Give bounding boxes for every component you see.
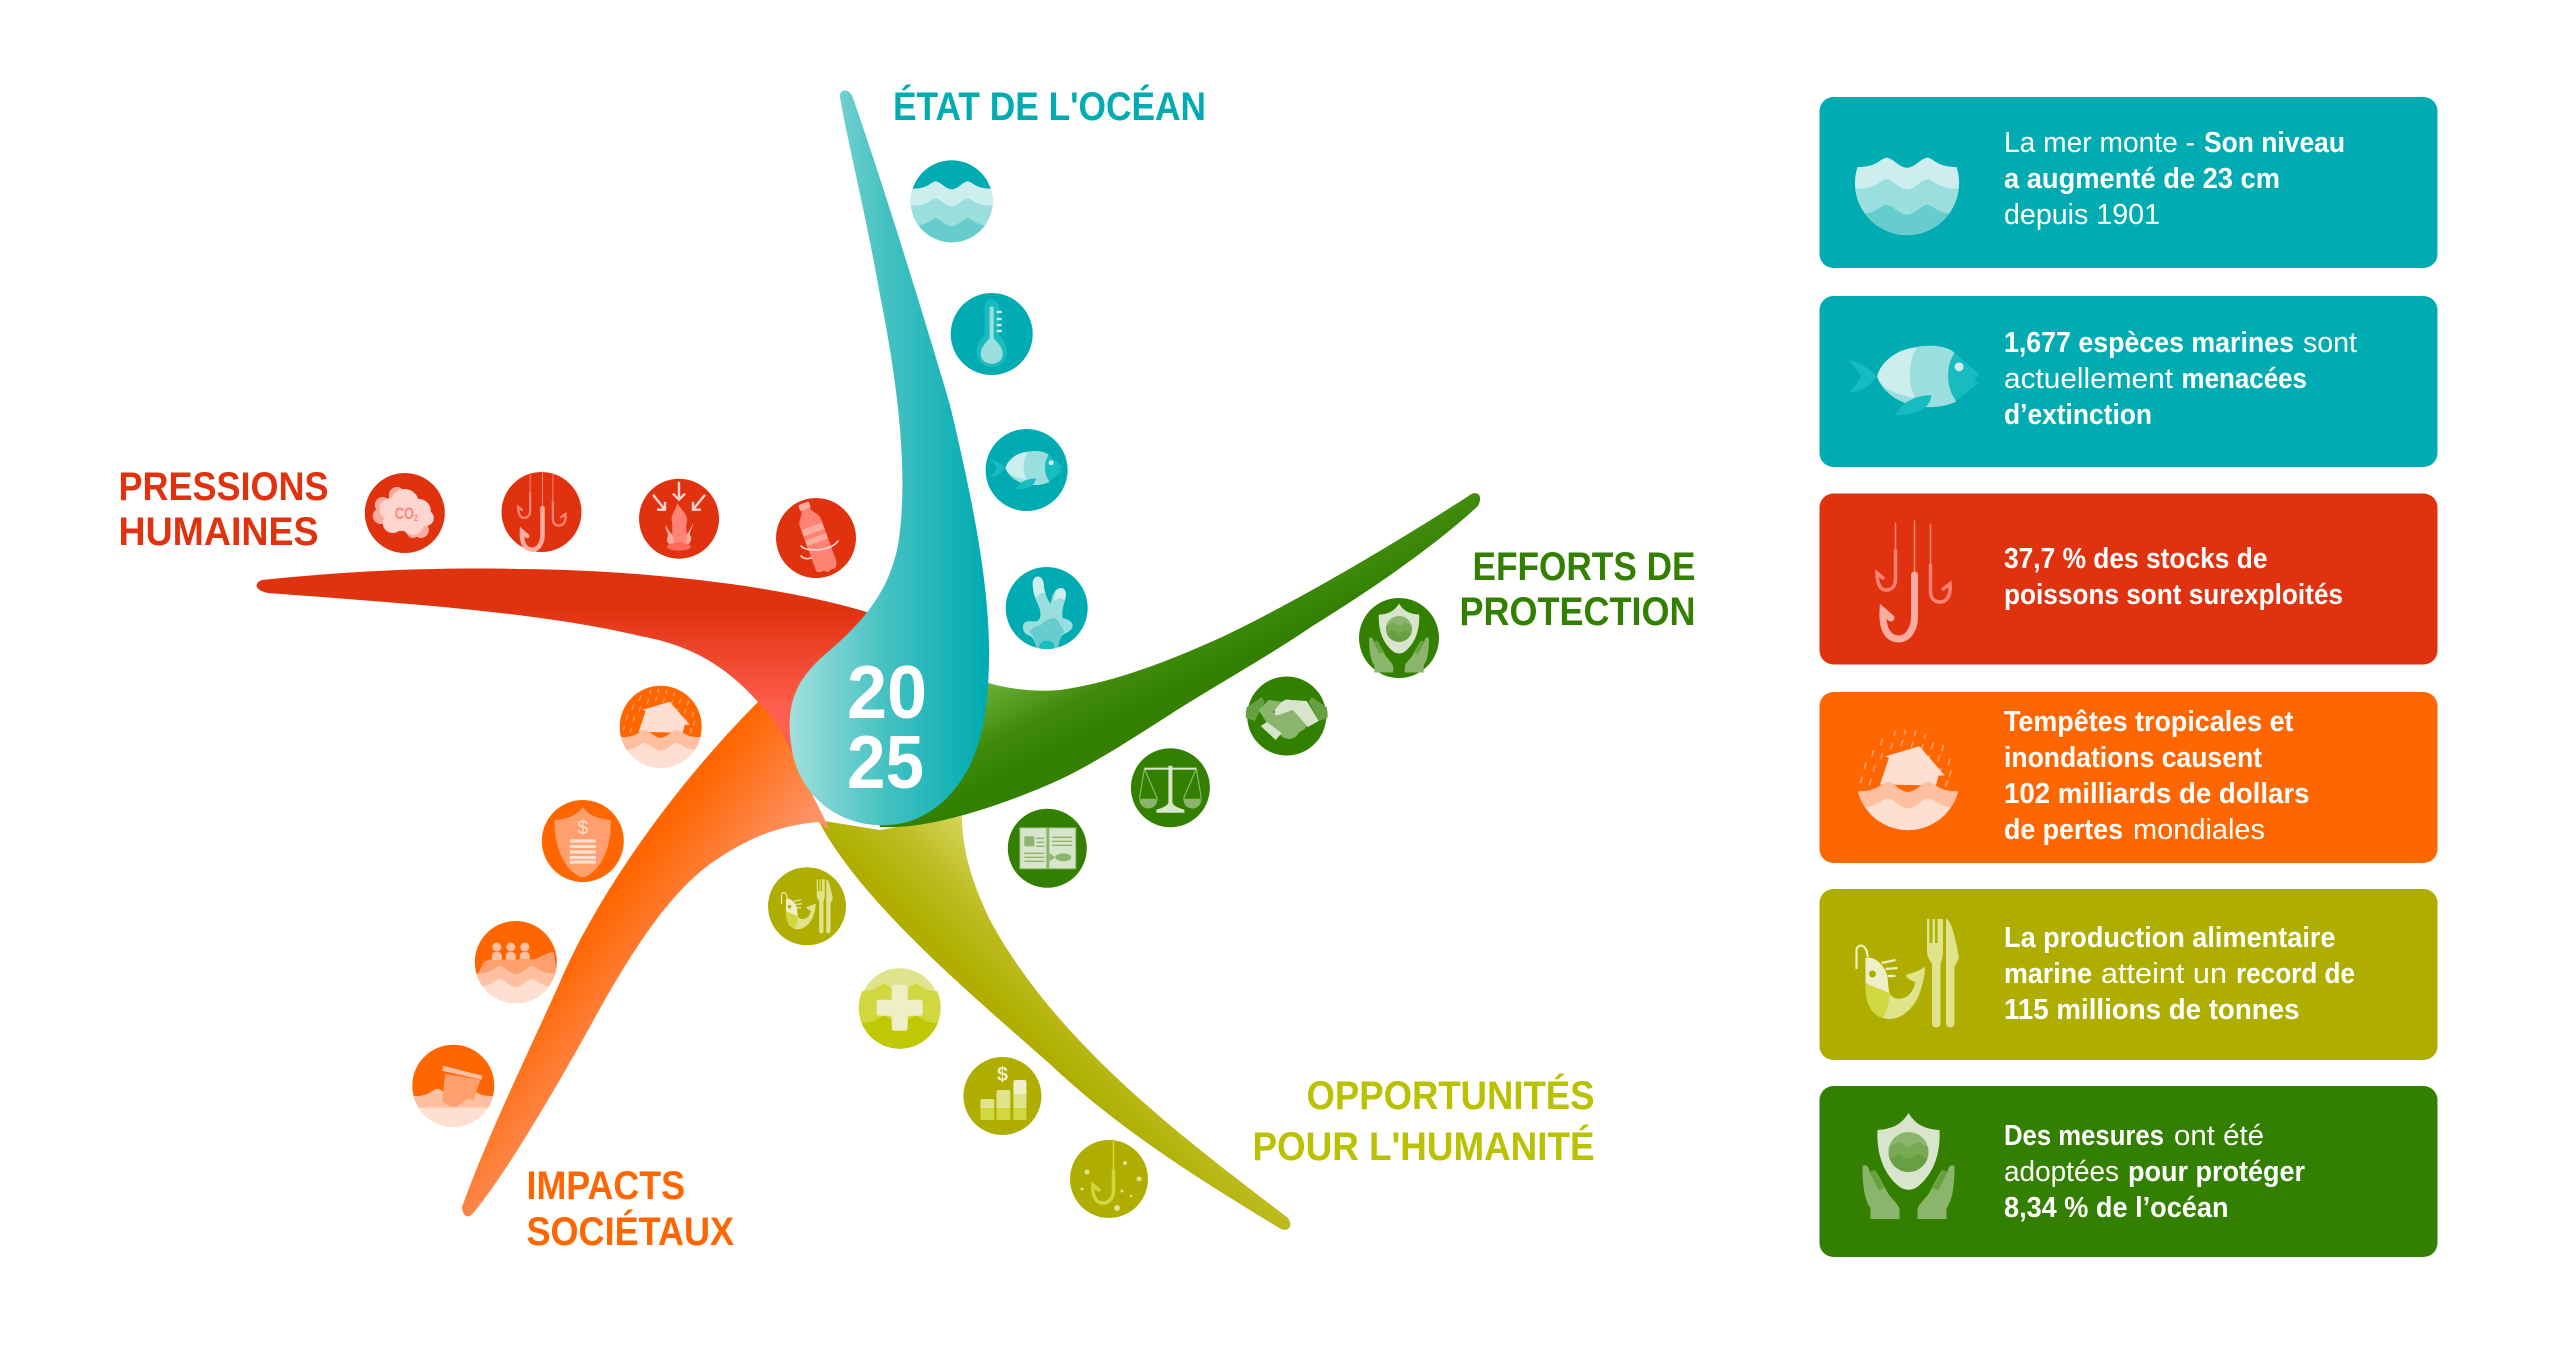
heading: impacts sociétaux: SOCIÉTAUX xyxy=(526,1209,734,1254)
icon: handshake xyxy=(1246,676,1328,756)
arm: efforts de protection xyxy=(860,493,1480,827)
heading: état de l'océan: ÉTAT DE L'OCÉAN xyxy=(893,84,1206,129)
text: ocean protection: 8,34 % de l’océan xyxy=(2004,1192,2228,1224)
text: overfishing: poissons sont surexploités xyxy=(2004,579,2343,611)
text: food production: atteint un xyxy=(2101,958,2227,990)
text: marine species: 1,677 espèces marines xyxy=(2004,327,2294,359)
icon: thermometer xyxy=(951,293,1033,375)
icon: shrimp and cutlery xyxy=(1856,919,1959,1028)
heading: efforts de protection: PROTECTION xyxy=(1460,590,1696,634)
text: ocean protection: Des mesures xyxy=(2004,1120,2164,1152)
arm: pressions humaines xyxy=(257,569,870,760)
text: ocean protection: adoptées xyxy=(2004,1156,2119,1188)
icon: shield and hands xyxy=(1862,1113,1954,1219)
icon: plastic bottle xyxy=(776,498,856,578)
text: marine species: sont xyxy=(2303,327,2357,359)
text: storms and floods: mondiales xyxy=(2133,814,2265,846)
icon: waves xyxy=(1854,158,1960,236)
year 2025: 25 xyxy=(847,720,924,804)
icon: people in water xyxy=(474,921,557,1003)
heading: efforts de protection xyxy=(1460,545,1696,634)
icon: sinking boat xyxy=(412,1044,494,1127)
text: storms and floods: 102 milliards de dollars xyxy=(2004,778,2310,810)
panel: food production xyxy=(1820,889,2438,1060)
heading: opportunités pour l'humanité: POUR L'HUMANITÉ xyxy=(1252,1124,1594,1169)
icon: hook with bubbles xyxy=(1070,1139,1148,1218)
text: marine species xyxy=(2004,327,2357,431)
heading: pressions humaines xyxy=(118,465,328,554)
heading: efforts de protection: EFFORTS DE xyxy=(1472,545,1696,589)
text: sea level: La mer monte - xyxy=(2004,127,2195,159)
text: marine species: d’extinction xyxy=(2004,399,2152,431)
icon: shield with dollar and coins: $ xyxy=(578,818,589,839)
icon: balance scale xyxy=(1131,748,1210,827)
text: ocean protection xyxy=(2004,1120,2305,1224)
panel: sea level xyxy=(1820,97,2438,268)
heading: opportunités pour l'humanité xyxy=(1252,1073,1594,1169)
icon: hooks xyxy=(1877,521,1950,639)
icon: shrimp and cutlery xyxy=(768,867,846,945)
icon: health cross xyxy=(858,968,941,1049)
icon: open book xyxy=(1008,809,1087,888)
text: sea level: Son niveau xyxy=(2204,127,2345,159)
panel: overfishing xyxy=(1820,494,2438,664)
text: food production xyxy=(2004,922,2355,1026)
icon: CO2 cloud: CO xyxy=(395,504,420,523)
text: overfishing: 37,7 % des stocks de xyxy=(2004,543,2268,575)
text: marine species: actuellement xyxy=(2004,363,2173,395)
text: sea level: a augmenté de 23 cm xyxy=(2004,163,2280,195)
heading: pressions humaines: PRESSIONS xyxy=(118,465,328,509)
arm: opportunités xyxy=(818,816,1290,1230)
icon: sea level waves xyxy=(910,160,993,242)
arm and hub: état de l'océan xyxy=(790,90,989,825)
text: storms and floods: inondations causent xyxy=(2004,742,2262,774)
heading: impacts sociétaux xyxy=(526,1164,734,1254)
text: storms and floods: de pertes xyxy=(2004,814,2123,846)
panel: ocean protection xyxy=(1820,1086,2438,1257)
text: sea level: depuis 1901 xyxy=(2004,199,2160,231)
year 2025: 20 xyxy=(847,650,927,734)
text: food production: marine xyxy=(2004,958,2092,990)
heading: opportunités pour l'humanité: OPPORTUNITÉS xyxy=(1306,1073,1594,1118)
icon: coral xyxy=(1006,567,1088,650)
text: ocean protection: pour protéger xyxy=(2128,1156,2305,1188)
text: food production: record de xyxy=(2236,958,2355,990)
arm: impacts sociétaux xyxy=(462,702,830,1216)
icon: fish xyxy=(986,429,1068,511)
icon: burning seaweed with arrows xyxy=(639,479,719,559)
icon: CO2 cloud: 2 xyxy=(414,513,418,523)
icon: flooded house xyxy=(1858,730,1958,830)
heading: pressions humaines: HUMAINES xyxy=(118,510,318,554)
heading: impacts sociétaux: IMPACTS xyxy=(526,1164,685,1208)
icon: flooded house xyxy=(620,686,702,768)
year 2025 xyxy=(847,650,927,804)
icon: CO2 cloud xyxy=(365,473,445,553)
text: storms and floods: Tempêtes tropicales et xyxy=(2004,706,2294,738)
text: ocean protection: ont été xyxy=(2174,1120,2264,1152)
icon: dollar and growing bars: $ xyxy=(997,1064,1008,1086)
text: food production: 115 millions de tonnes xyxy=(2004,994,2300,1026)
icon: dollar and growing bars xyxy=(963,1057,1041,1135)
panel: storms and floods xyxy=(1820,692,2438,863)
text: marine species: menacées xyxy=(2182,363,2307,395)
icon: fishing hooks xyxy=(502,466,582,552)
text: storms and floods xyxy=(2004,706,2310,846)
icon: fish xyxy=(1848,346,1980,415)
text: sea level xyxy=(2004,127,2345,231)
star diagram xyxy=(257,90,1480,1230)
icon: shield with dollar and coins xyxy=(542,800,624,882)
text: overfishing xyxy=(2004,543,2343,611)
icon: shield and hands xyxy=(1359,598,1439,678)
panel: marine species xyxy=(1820,296,2438,467)
text: food production: La production alimentaire xyxy=(2004,922,2336,954)
